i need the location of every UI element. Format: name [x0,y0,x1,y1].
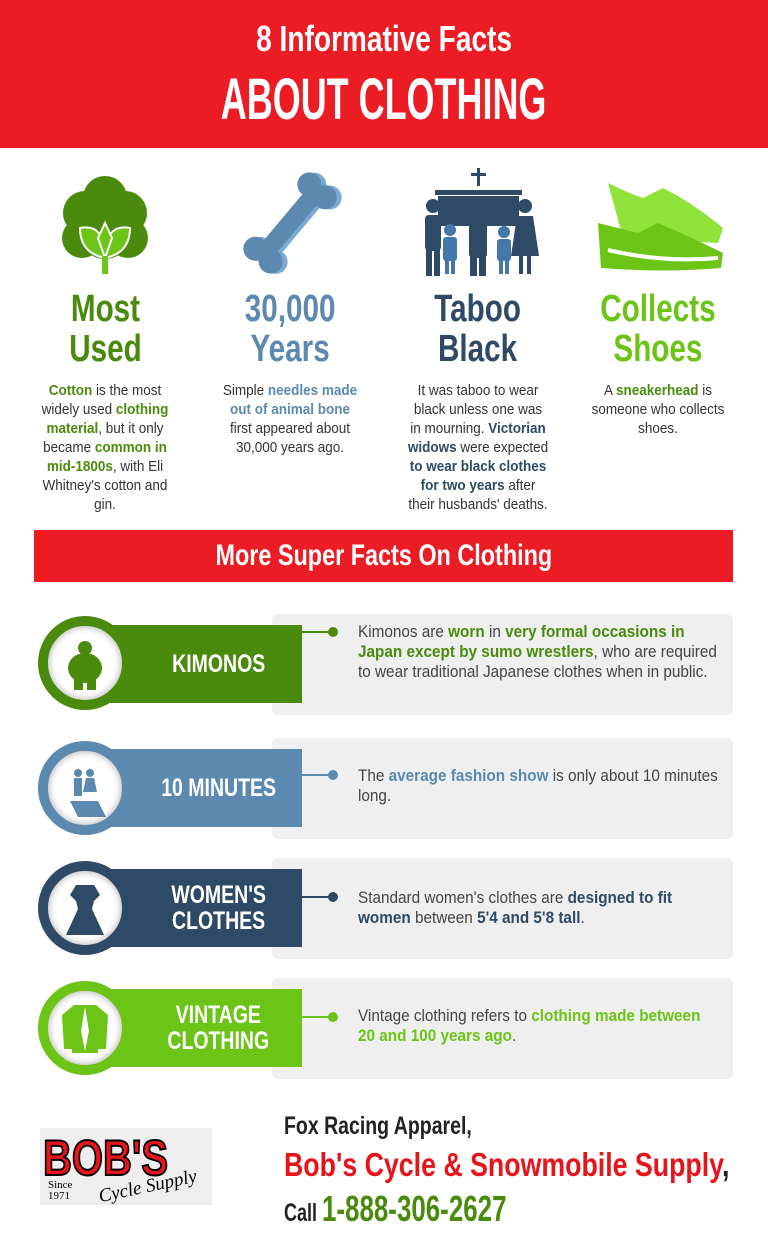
heading [434,288,521,370]
heading: Used [69,328,141,370]
logo: Since [48,1179,72,1191]
heading: Black [438,328,518,370]
icon: jacket [38,981,132,1075]
icon: funeral [425,168,539,276]
heading: 30,000 [245,288,335,330]
footer text: Bob's Cycle & Snowmobile Supply, [284,1146,729,1183]
logo: 1971 [48,1190,70,1202]
fact column: collects shoes [592,183,724,437]
row: 10 minutes [38,738,733,839]
label bar [95,989,302,1067]
heading: Years [250,328,330,370]
label bar [95,625,302,703]
icon: dress [38,861,132,955]
heading [69,288,141,370]
footer text [284,1112,729,1229]
text: Standard women's clothes are designed to fit women between 5'4 and 5'8 tall. [358,888,672,927]
label bar: WOMEN'S [171,881,266,909]
section banner [34,530,733,582]
icon: sumo circle [38,616,132,710]
heading: Collects [600,288,716,330]
text: The average fashion show is only about 10 minutes long. [358,766,718,805]
fact column: 30,000 years [223,172,357,456]
text: A sneakerhead is someone who collects shoes. [592,382,724,437]
icon: cotton plant [62,176,148,274]
label bar: CLOTHING [168,1027,269,1055]
logo: BOB'S [43,1130,168,1186]
row: women's clothes [38,858,733,959]
icon: sneakers [598,183,723,270]
title line 1: 8 Informative Facts [256,18,512,59]
row: kimonos [38,614,733,715]
text: Vintage clothing refers to clothing made between 20 and 100 years ago. [358,1006,700,1045]
label bar: VINTAGE [176,1001,261,1029]
heading: Taboo [435,288,521,330]
heading: Most [70,288,140,330]
label bar: KIMONOS [172,650,265,678]
heading [600,288,716,370]
fact column: taboo black [408,168,548,513]
logo: Cycle Supply [97,1166,199,1207]
label bar: CLOTHES [172,907,265,935]
logo [40,1128,212,1205]
fact column: most used [42,176,168,513]
title line 2: ABOUT CLOTHING [221,67,547,132]
label bar [95,869,302,947]
icon: bone [243,172,342,274]
text: Simple needles made out of animal bone first appeared about 30,000 years ago. [223,382,357,456]
text: Cotton is the most widely used clothing material, but it only became common in mid-1800s, with Eli Whitney's cotton and gin. [42,382,168,513]
row: vintage clothing [38,978,733,1079]
label bar [95,749,302,827]
heading [245,288,335,370]
header banner [0,0,768,148]
icon: fashion show [38,741,132,835]
label bar: 10 MINUTES [161,774,276,802]
text: It was taboo to wear black unless one was in mourning. Victorian widows were expected to wear black clothes for two years after their husbands' deaths. [408,382,548,513]
footer text: Call 1-888-306-2627 [284,1188,506,1229]
text: Kimonos are worn in very formal occasions in Japan except by sumo wrestlers, who are required to wear traditional Japanese clothes when in public. [358,622,717,681]
footer text: Fox Racing Apparel, [284,1112,472,1140]
section banner: More Super Facts On Clothing [215,539,552,572]
heading: Shoes [614,328,702,370]
